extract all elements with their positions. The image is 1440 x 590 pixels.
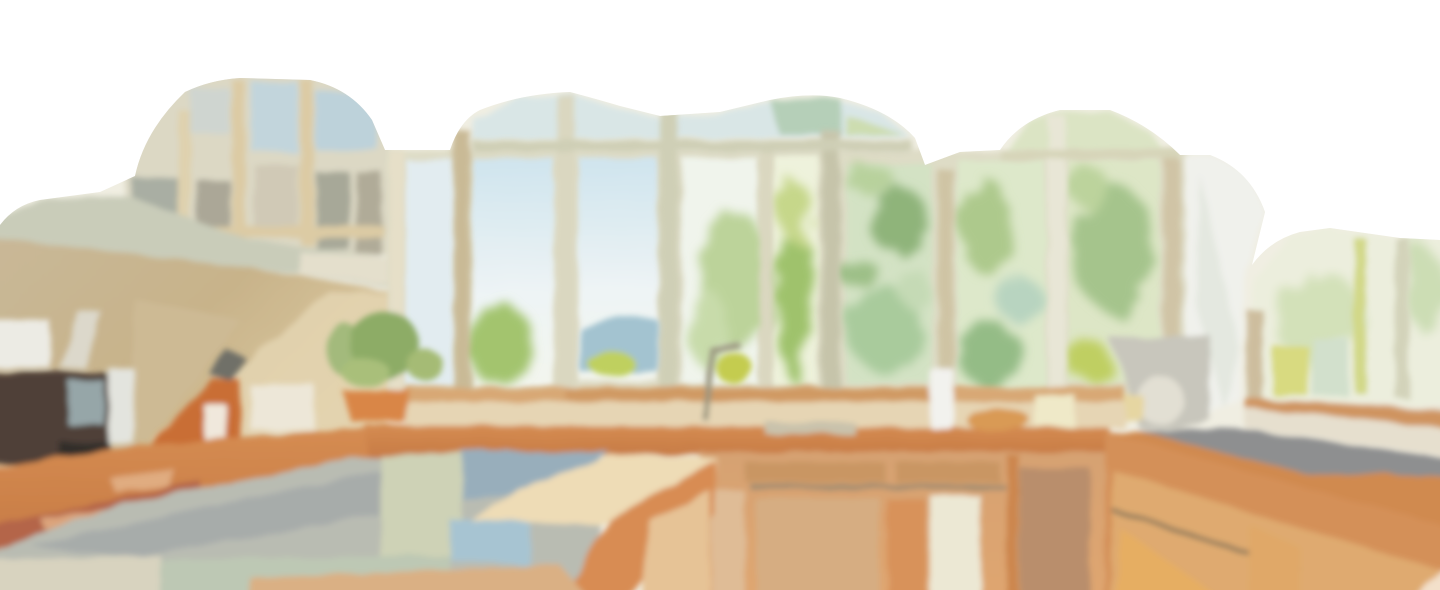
panel: upper glass cabinets [125,70,390,255]
panel: back counter top [365,425,1110,458]
corner wash [1416,568,1440,590]
panel: cabinet underside shelf [0,195,388,286]
window: mullions [390,95,1180,395]
window: sky panes [405,160,455,385]
panel: main window frame [388,150,1188,400]
curtain [1185,155,1266,425]
sink basin [765,422,855,434]
panel: tiled back wall [0,236,388,470]
icon: soap bottle [930,368,954,430]
icon: sink faucet [705,345,740,420]
panel: kitchen island [0,450,716,590]
panel: right counter and cabinets [1105,432,1440,590]
icon: stand mixer [1108,335,1210,430]
panel: left counter [0,428,368,555]
icon: gas cooktop [1140,428,1440,476]
panel: window sill [405,387,1125,403]
tree and lemon detail [716,352,752,384]
panel: transom glass [472,94,1165,152]
panel: lower cabinets [700,452,1110,590]
icon: knife block [150,348,315,445]
icon: toaster [0,312,134,464]
back splash right [1244,406,1440,456]
icon: potted plant [327,311,443,422]
icon: fruit bowl [966,395,1075,431]
right window [1274,240,1440,368]
window: distant hills [580,316,658,372]
window: garden foliage [468,166,1440,387]
